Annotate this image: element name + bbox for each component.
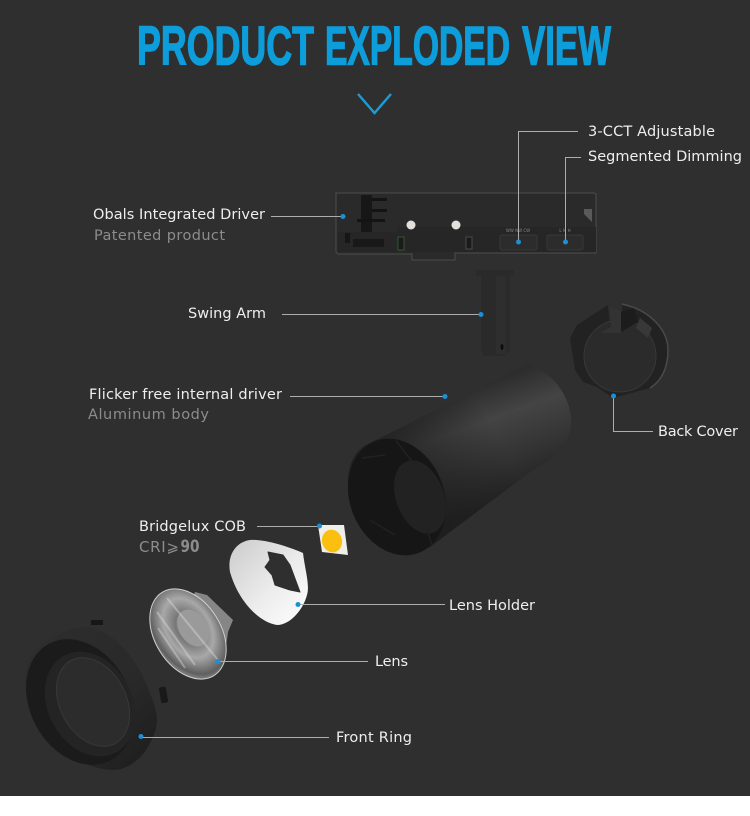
callout: Obals Integrated Driver: [93, 207, 346, 244]
product: track adapter driver: [336, 193, 596, 260]
callout: Bridgelux COB: Bridgelux COB: [139, 519, 246, 535]
callout: Front Ring: [138, 730, 412, 746]
product: lens holder: [229, 540, 308, 625]
callout: Back Cover: Back Cover: [658, 424, 738, 440]
callout: Segmented Dimming: [563, 149, 742, 244]
callout: Bridgelux COB: CRI⩾: [139, 538, 179, 556]
product: track adapter driver: WW NW CW: [506, 228, 530, 233]
title: VIEW: [522, 16, 611, 76]
callout: Lens Holder: [296, 598, 535, 614]
callout: Segmented Dimming: Segmented Dimming: [588, 149, 742, 165]
product: COB chip: [318, 525, 348, 555]
callout: Flicker free internal driver: Flicker free internal driver: [89, 387, 282, 403]
callout: Obals Integrated Driver: Obals Integrated Driver: [93, 207, 265, 223]
callout: Lens Holder: Lens Holder: [449, 598, 535, 614]
product: cylinder body: [331, 364, 571, 570]
product: track adapter driver: L M H: [559, 228, 571, 233]
title: [137, 16, 611, 76]
callout: Bridgelux COB: [139, 519, 322, 556]
callout: Lens: [216, 654, 408, 670]
callout: Back Cover: [611, 394, 738, 440]
title: EXPLODED: [325, 16, 510, 76]
product: back cover: [570, 304, 668, 398]
callout: Obals Integrated Driver: Patented product: [94, 228, 225, 244]
callout: Bridgelux COB: 90: [180, 537, 200, 556]
product: swing arm: [476, 270, 514, 356]
product: front ring: [5, 620, 168, 784]
callout: Flicker free internal driver: [88, 387, 448, 423]
callout: 3-CCT Adjustable: 3-CCT Adjustable: [588, 124, 715, 140]
product: lens: [134, 575, 242, 693]
callout: Lens: Lens: [375, 654, 408, 670]
callout: 3-CCT Adjustable: [516, 124, 715, 244]
icon: down chevron arrow: [358, 94, 391, 113]
callout: Swing Arm: Swing Arm: [188, 306, 266, 322]
callout: Front Ring: Front Ring: [336, 730, 412, 746]
title: PRODUCT: [137, 16, 314, 76]
callout: Flicker free internal driver: Aluminum body: [88, 407, 209, 423]
callout: Swing Arm: [188, 306, 484, 322]
